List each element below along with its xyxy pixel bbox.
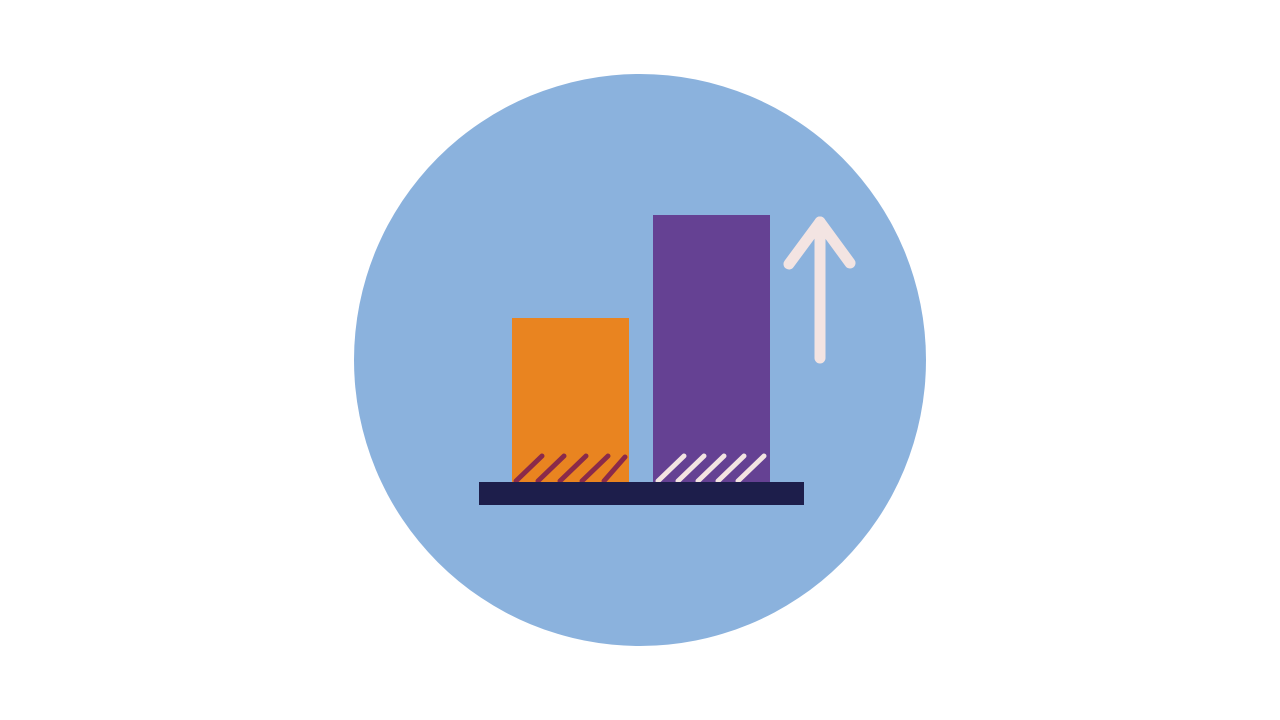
background circle [354,74,926,646]
bar: purple [653,215,770,484]
base line [479,482,804,505]
arrow: up [789,222,850,358]
bar: orange [512,318,629,484]
